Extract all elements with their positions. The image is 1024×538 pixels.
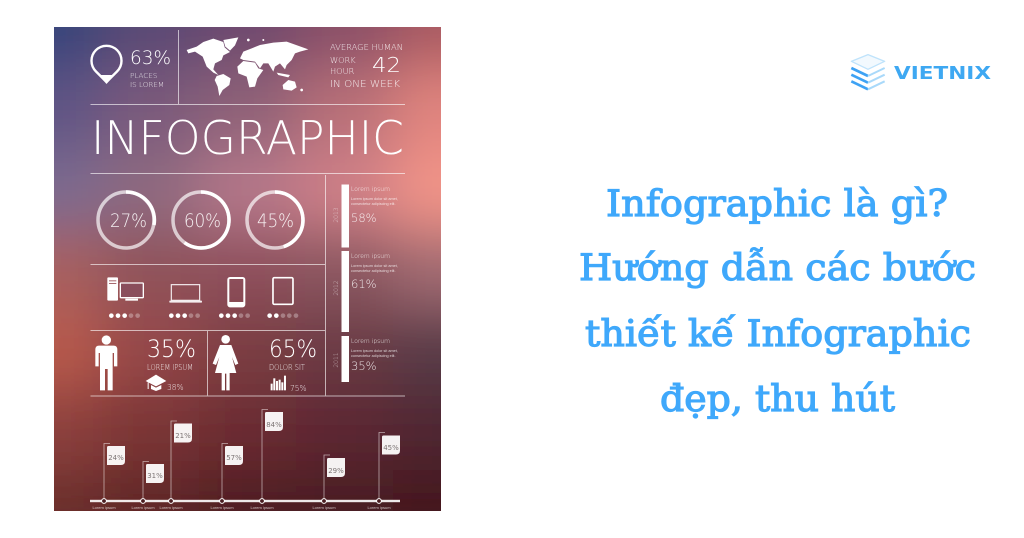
ring 45%: [247, 192, 303, 248]
icon: graduation cap: [146, 375, 166, 391]
flag 31%: 31%: [147, 472, 163, 480]
63 percent value: 63%: [130, 47, 171, 69]
bar 2013: 58%: [351, 211, 377, 225]
flag 24%: Lorem ipsum: [92, 505, 116, 510]
heading: article title: đẹp, thu hút: [660, 379, 896, 420]
ring 60%: [173, 192, 229, 248]
heading: article title: Hướng dẫn các bước: [579, 248, 976, 289]
bar 2013: Lorem ipsum dolor sit amet,: [351, 197, 398, 201]
ring 45%: 45%: [257, 210, 294, 232]
icon: laptop: [169, 285, 202, 303]
rating dots: [109, 313, 298, 318]
lorem ipsum label: LOREM IPSUM: [147, 363, 193, 372]
flag 57%: Lorem ipsum: [210, 505, 234, 510]
flag 84%: [250, 410, 283, 510]
flag 29%: 29%: [328, 467, 344, 475]
heading: article title: thiết kế Infographic: [585, 314, 971, 355]
device icons row: [107, 277, 298, 318]
flag 45%: Lorem ipsum: [367, 505, 391, 510]
flag 57%: [210, 444, 243, 510]
icon: server stack: [851, 55, 885, 89]
world map: [187, 37, 308, 96]
ring 60%: 60%: [184, 210, 221, 232]
flag 45%: 45%: [383, 444, 399, 452]
in one week label: IN ONE WEEK: [330, 79, 401, 90]
poster title: INFOGRAPHIC: [91, 111, 404, 165]
35% value: 35%: [147, 335, 196, 363]
bar 2011: Lorem ipsum: [351, 338, 390, 345]
icon: desktop computer: [107, 277, 143, 301]
bar 2012: 2012: [333, 280, 340, 296]
flag 31%: Lorem ipsum: [131, 505, 155, 510]
icon: tablet: [273, 278, 293, 304]
bar 2011: consectetur adipiscing elit.: [351, 354, 396, 358]
flag 29%: [312, 455, 345, 510]
bar 2011: Lorem ipsum dolor sit amet,: [351, 349, 398, 353]
flag 31%: [131, 462, 164, 510]
logo wordmark: VIETNIX: [894, 64, 992, 84]
65% value: 65%: [269, 335, 317, 363]
icon: man: [95, 335, 117, 390]
stat: average human work hour: [330, 42, 403, 90]
flag 24%: 24%: [108, 454, 124, 462]
timeline axis: [90, 500, 400, 502]
bar 2011: 2011: [333, 352, 340, 368]
places label: IS LOREM: [130, 80, 164, 89]
panel: infographic poster: [54, 27, 441, 511]
bar 2013: 2013: [333, 207, 340, 223]
flag 21%: [159, 421, 192, 510]
logo: Vietnix: [851, 55, 992, 89]
bar 2013: Lorem ipsum: [351, 186, 390, 193]
bar 2012: Lorem ipsum dolor sit amet,: [351, 264, 398, 268]
gender stats: [95, 335, 317, 393]
bar 2013: consectetur adipiscing elit.: [351, 202, 396, 206]
chart: donut rings: [98, 192, 303, 248]
icon: smartphone: [228, 278, 244, 306]
bar 2012: 61%: [351, 277, 377, 291]
flag 21%: Lorem ipsum: [159, 505, 183, 510]
75% value: 75%: [290, 384, 307, 393]
bar 2012: consectetur adipiscing elit.: [351, 269, 396, 273]
flag 57%: 57%: [226, 454, 242, 462]
icon: bar chart: [271, 376, 286, 390]
bar 2013: [333, 184, 398, 248]
work hour label: WORK: [330, 55, 356, 65]
flag 29%: Lorem ipsum: [312, 505, 336, 510]
bar 2011: 35%: [351, 359, 377, 373]
38% value: 38%: [167, 383, 184, 392]
bar 2011: [333, 336, 398, 382]
flag 24%: [92, 444, 125, 510]
bar 2012: [333, 251, 398, 332]
flag 45%: [367, 432, 400, 510]
heading: article title: [579, 184, 976, 420]
42 value: 42: [372, 53, 401, 77]
icon: map pin: [92, 46, 122, 84]
bar 2012: Lorem ipsum: [351, 253, 390, 260]
stat: 63% places: [92, 46, 171, 89]
heading: article title: Infographic là gì?: [606, 184, 948, 225]
poster background: [54, 27, 441, 511]
average human label: AVERAGE HUMAN: [330, 42, 403, 52]
ring 27%: 27%: [110, 210, 147, 232]
places label: PLACES: [130, 71, 157, 80]
timeline flag chart: [90, 410, 400, 510]
icon: woman: [213, 335, 238, 390]
timeline bars by year: [333, 184, 398, 382]
flag 21%: 21%: [175, 432, 191, 440]
ring 27%: [98, 192, 154, 248]
flag 84%: Lorem ipsum: [250, 505, 274, 510]
work hour label: HOUR: [330, 66, 355, 76]
dolor sit label: DOLOR SIT: [269, 363, 305, 372]
flag 84%: 84%: [266, 421, 282, 429]
